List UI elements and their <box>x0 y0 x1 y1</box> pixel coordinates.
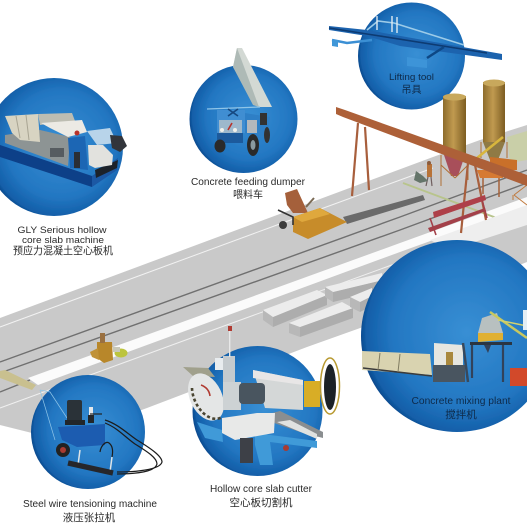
dark fresh concrete strip <box>343 195 425 224</box>
red crossbeam <box>428 195 487 235</box>
label: concrete feeding dumper <box>191 177 306 201</box>
lifting beam <box>329 16 502 68</box>
silos <box>441 80 507 186</box>
gantry crane and batching area <box>90 80 527 363</box>
label: concrete mixing plant: 搅拌机 <box>445 408 477 421</box>
label: concrete mixing plant <box>412 396 511 421</box>
casting line grooves <box>0 170 527 392</box>
label: concrete feeding dumper: 喂料车 <box>233 188 263 201</box>
label: hollow core slab cutter: Hollow core slab cutter <box>210 484 313 495</box>
lifting tool label: 吊具 <box>402 84 422 96</box>
label: steel wire tensioning machine <box>23 499 157 524</box>
label: concrete mixing plant: Concrete mixing plant <box>412 396 511 407</box>
circle: steel wire tensioning machine <box>31 375 162 489</box>
lower white guide line <box>0 215 527 408</box>
slab machine <box>0 113 127 187</box>
tensioning unit on the line <box>90 333 128 363</box>
production floor <box>0 125 527 440</box>
white slabs by gantry <box>430 205 527 250</box>
label: concrete feeding dumper: Concrete feeding dumper <box>191 177 306 188</box>
gantry legs <box>352 123 486 233</box>
lifting tool label <box>389 72 434 96</box>
circle: hollow core slab cutter <box>181 326 340 476</box>
tensioning machine <box>40 390 162 474</box>
lifting tool label: Lifting tool <box>389 72 434 83</box>
circle: concrete feeding dumper <box>190 48 298 173</box>
stacked slabs <box>263 273 383 337</box>
label: hollow core machine: GLY Serious hollow <box>18 225 107 236</box>
label: steel wire tensioning machine: Steel wire tensioning machine <box>23 499 157 510</box>
label: hollow core machine: core slab machine <box>22 235 104 246</box>
dumper vehicle <box>207 48 272 156</box>
label: hollow core machine <box>13 225 113 257</box>
circle: concrete mixing plant <box>361 240 527 432</box>
tan edge strip <box>0 370 36 390</box>
label: hollow core slab cutter: 空心板切割机 <box>230 496 293 509</box>
gantry beam <box>336 107 527 186</box>
mixing plant equipment <box>362 310 527 386</box>
pale green rail <box>403 183 502 220</box>
white slab strip <box>28 197 527 385</box>
concrete feeder machine <box>278 189 347 239</box>
circle: lifting tool <box>329 2 502 110</box>
circle: hollow core machine <box>0 78 127 216</box>
label: hollow core slab cutter <box>210 484 313 509</box>
label: steel wire tensioning machine: 液压张拉机 <box>63 511 116 524</box>
upper white guide line <box>0 168 433 327</box>
label: hollow core machine: 预应力混凝土空心板机 <box>13 244 113 257</box>
workers <box>414 161 432 186</box>
slab cutter <box>181 326 340 465</box>
batching units <box>477 131 527 205</box>
